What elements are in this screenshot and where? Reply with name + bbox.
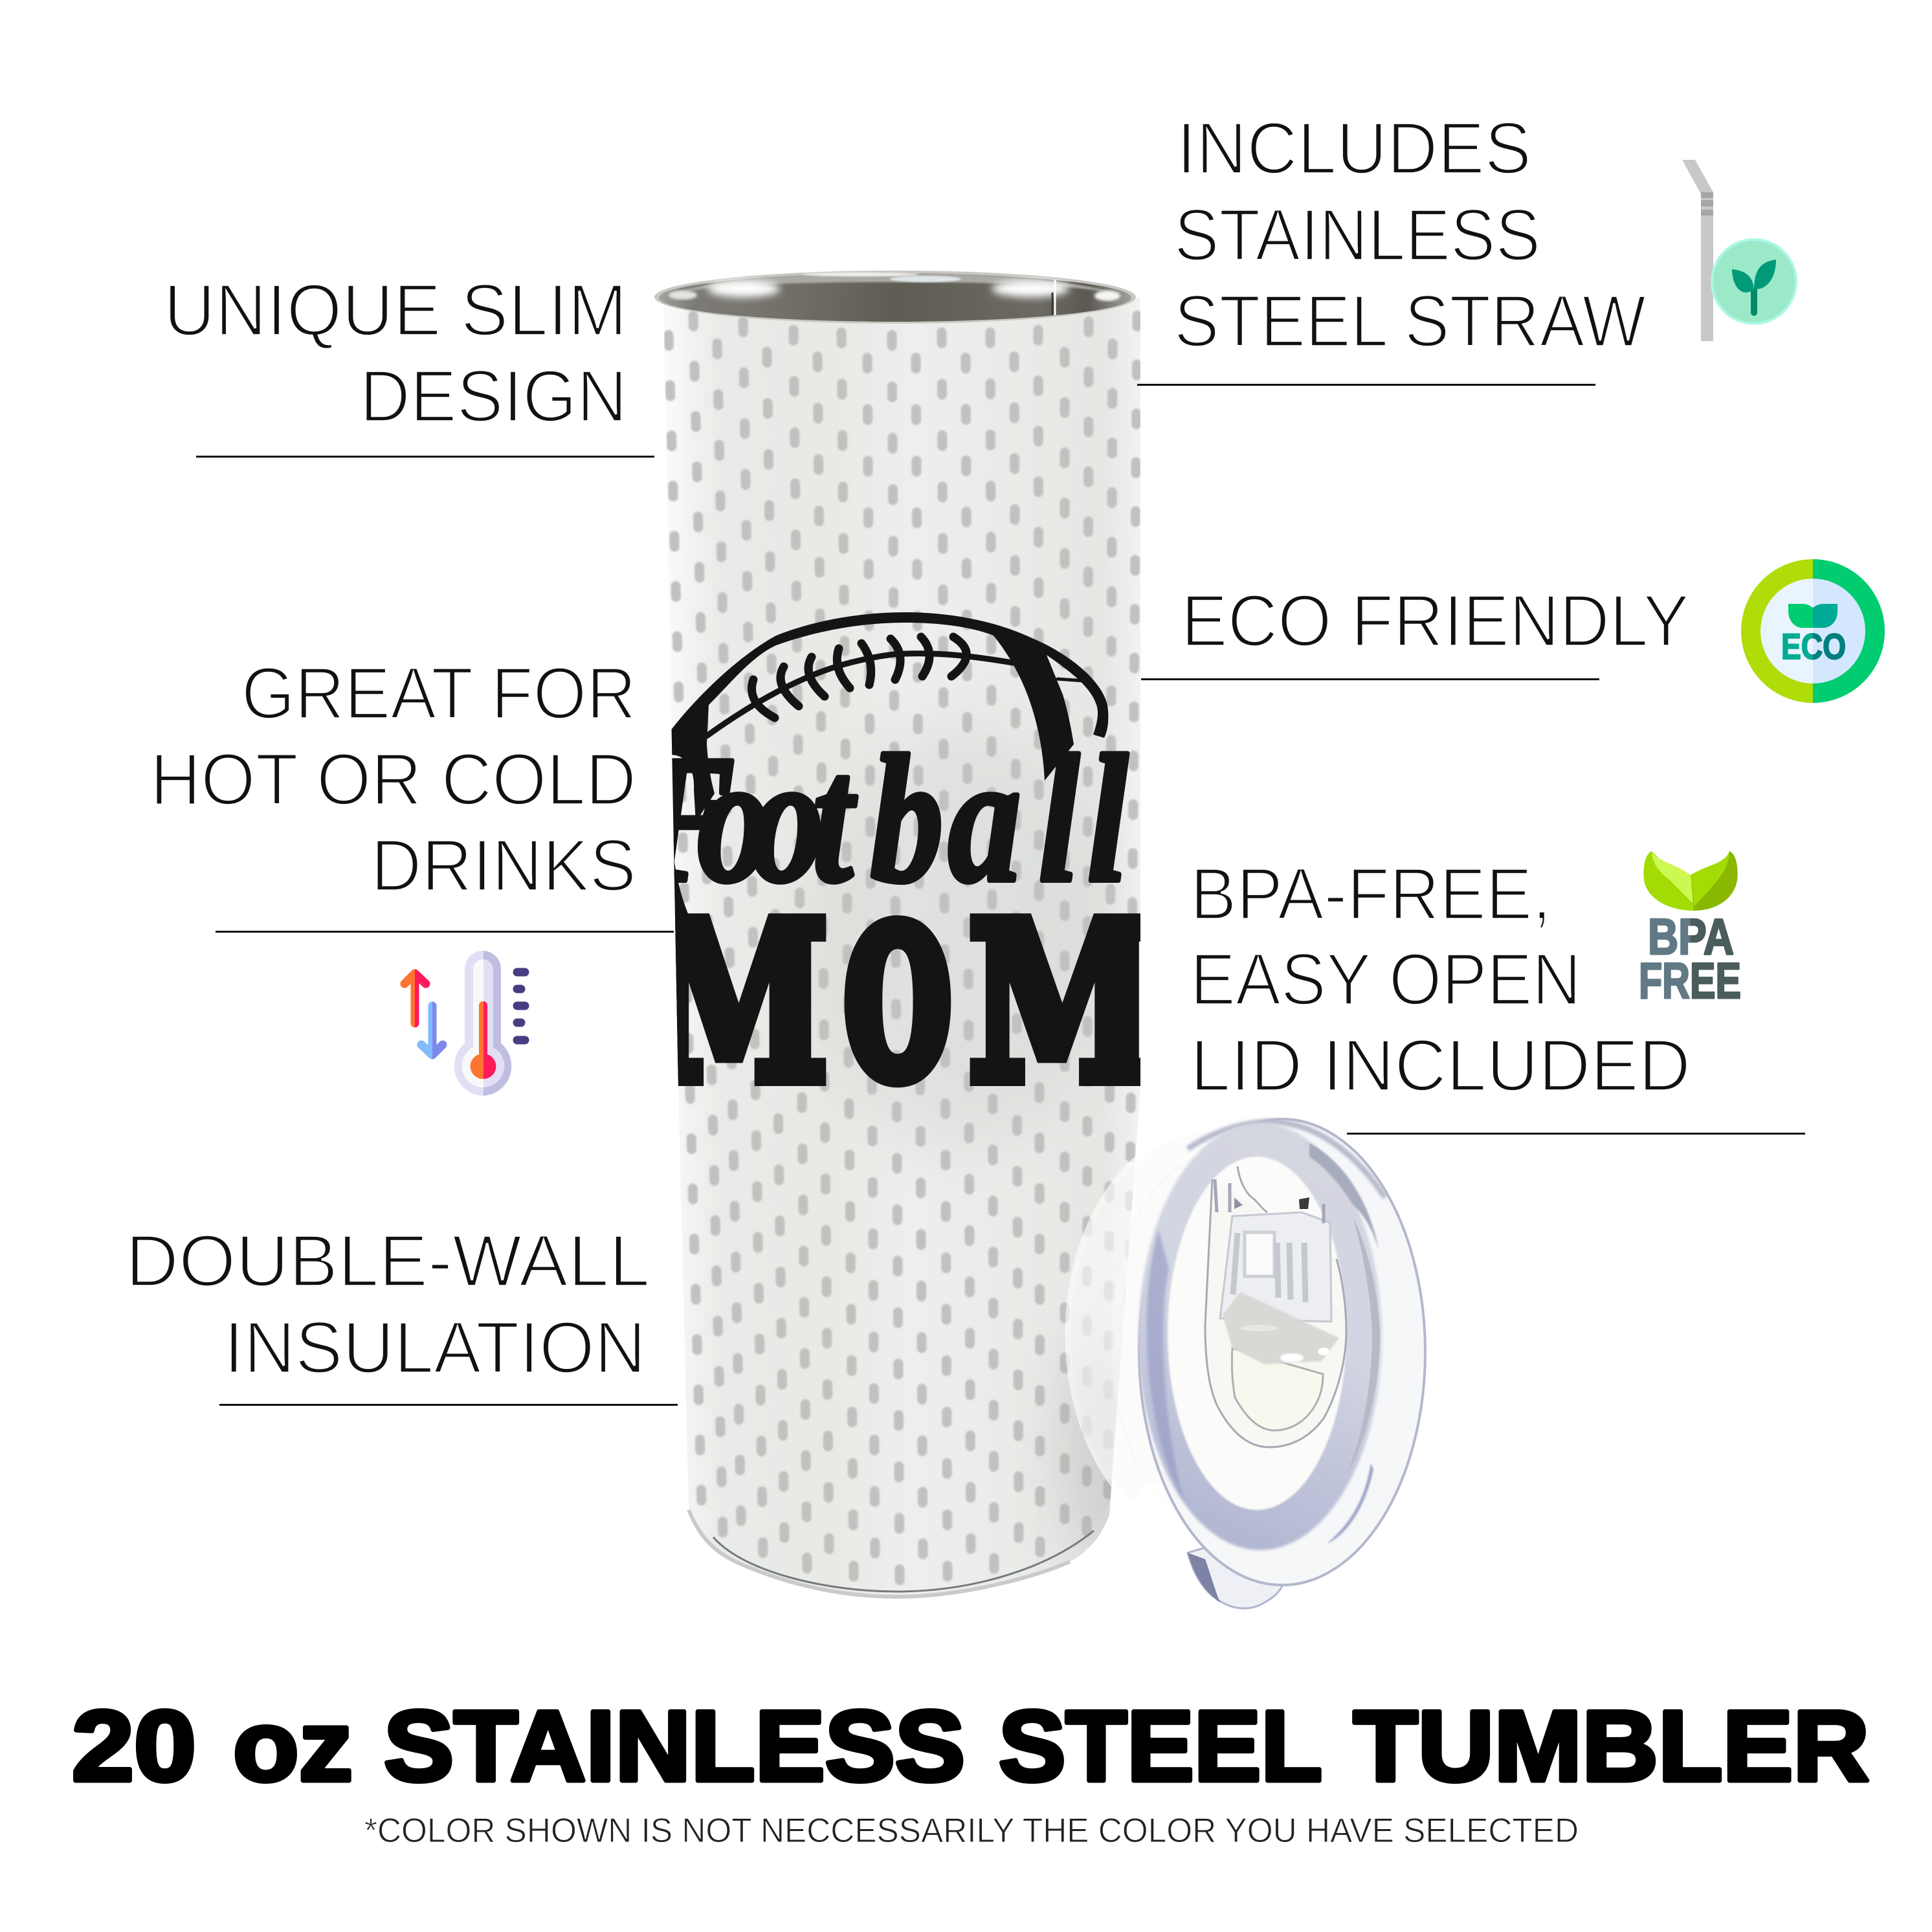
bottom right highlight [1327, 1463, 1373, 1544]
title: TUMBLER [1353, 1690, 1869, 1802]
callout: stainless steel straw: STEEL STRAW [1174, 280, 1646, 362]
MOM lettering [674, 913, 1140, 1087]
callout: unique slim design: DESIGN [360, 355, 627, 437]
MOM lettering: M [650, 876, 828, 1129]
body midsection shading [818, 739, 1094, 1138]
football graphic [667, 612, 1108, 919]
lid opening [1168, 1157, 1346, 1510]
silicone gasket [1223, 1292, 1339, 1364]
callout: eco friendly: ECO FRIENDLY [1181, 580, 1689, 661]
tumbler [637, 271, 1157, 1605]
lid knob [1188, 1540, 1285, 1608]
inner frost ring line [1110, 1152, 1337, 1527]
base frosted edge [689, 1510, 1070, 1597]
callout: bpa-free lid: BPA-FREE, [1190, 853, 1551, 935]
frost base [1113, 1482, 1230, 1556]
title: STEEL [999, 1690, 1322, 1802]
footnote: *COLOR SHOWN IS NOT NECCESSARILY THE COLOR YOU HAVE SELECTED [364, 1812, 1579, 1850]
lid clear band [1138, 1123, 1382, 1550]
lid front body [1139, 1119, 1425, 1585]
slider tab [1215, 1166, 1331, 1322]
callout: stainless steel straw [1137, 107, 1646, 386]
straw [1682, 160, 1713, 341]
callout: hot or cold drinks [150, 652, 674, 933]
callout: stainless steel straw: STAINLESS [1174, 194, 1540, 276]
sprout badge [1711, 238, 1797, 325]
leaves [1643, 851, 1696, 911]
icon: straw with sprout [1682, 160, 1797, 341]
down arrow [421, 1006, 443, 1055]
thermometer casing [454, 951, 483, 1096]
bpa lettering: BPA [1648, 908, 1734, 965]
MOM lettering: M [969, 876, 1157, 1129]
football lace [707, 637, 1085, 736]
title [72, 1690, 1869, 1802]
steel rim [654, 271, 1136, 324]
callout: bpa-free lid: LID INCLUDED [1190, 1025, 1691, 1106]
lid [1068, 1119, 1425, 1608]
base shadow rim [713, 1531, 1094, 1592]
callout: hot or cold drinks: DRINKS [371, 825, 636, 906]
icon: eco badge [1741, 559, 1885, 703]
spout inner groove [1232, 1348, 1323, 1430]
callout: double-wall insulation: DOUBLE-WALL [126, 1220, 650, 1302]
callout: unique slim design [164, 269, 654, 458]
callout: bpa-free lid [1190, 853, 1805, 1135]
callout: hot or cold drinks: GREAT FOR [241, 652, 636, 734]
top right crescent [1309, 1143, 1379, 1249]
mercury [471, 1001, 483, 1079]
jersey dot pattern [669, 316, 1137, 1582]
title: oz [233, 1690, 353, 1802]
tumbler body [660, 285, 1146, 1605]
bpa lettering [1639, 908, 1741, 1009]
callout: double-wall insulation [126, 1220, 678, 1406]
lid top rim arc [1188, 1122, 1385, 1197]
frosted lid back [1068, 1129, 1355, 1540]
callout: double-wall insulation: INSULATION [224, 1307, 646, 1388]
body shadow near lid [1050, 1373, 1116, 1553]
icon: bpa free [1639, 851, 1741, 1009]
callout: bpa-free lid: EASY OPEN [1190, 938, 1581, 1020]
football outline and stripe [667, 612, 1108, 822]
callout: stainless steel straw: INCLUDES [1177, 107, 1531, 189]
callout: unique slim design: UNIQUE SLIM [164, 269, 627, 351]
title: STAINLESS [384, 1690, 965, 1802]
title: 20 [72, 1690, 196, 1802]
spout groove [1205, 1179, 1346, 1447]
football lower left curve [674, 858, 688, 919]
up arrow [405, 973, 426, 1023]
eco text: ECO [1781, 626, 1846, 667]
bpa lettering: FREE [1639, 952, 1741, 1009]
left band deep shading [1146, 1230, 1184, 1502]
scale ticks [517, 972, 525, 1040]
icon: thermometer with arrows [405, 951, 525, 1096]
MOM lettering: O [846, 888, 949, 1121]
callout: hot or cold drinks: HOT OR COLD [150, 738, 636, 820]
right ring band [1346, 1217, 1380, 1476]
football script lettering: Football [637, 718, 1128, 920]
eco leaves [1788, 604, 1813, 628]
